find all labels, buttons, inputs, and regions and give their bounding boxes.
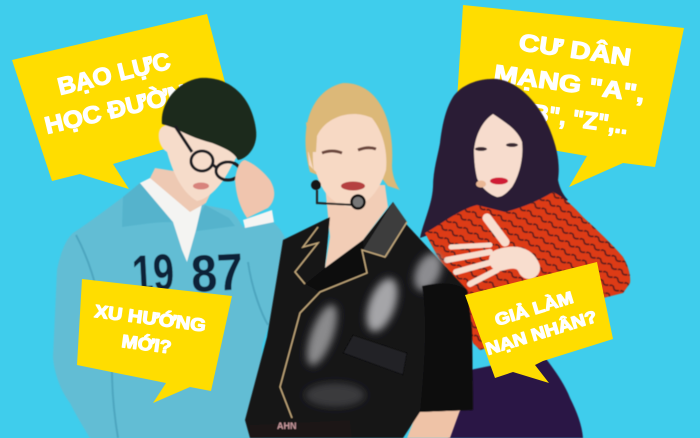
heading: bao luc hoc duong: BẠO LỰC (55, 48, 173, 101)
front hair strands (306, 118, 392, 172)
heading: cu dan mang: "B", "Z",.. (519, 98, 630, 140)
red top (425, 192, 630, 350)
sweatshirt collar and folds (122, 183, 235, 232)
heading: cu dan mang: CƯ DÂN (517, 28, 633, 72)
neck (150, 168, 218, 212)
white shirt (140, 178, 203, 262)
hair (162, 78, 256, 160)
shirt cuff (243, 210, 274, 228)
headset microphone (476, 180, 486, 188)
person: man in teal sweatshirt (53, 78, 287, 438)
arm (407, 405, 462, 438)
text: gia lam nan nhan: NẠN NHÂN? (484, 307, 599, 359)
ear and face (308, 114, 386, 208)
headset microphone (311, 180, 364, 208)
callout: top left speech bubble (12, 14, 237, 189)
heading: bao luc hoc duong (42, 48, 209, 140)
belt: AHN (277, 421, 296, 431)
face (159, 118, 242, 201)
text: xu huong moi: XU HƯỚNG (93, 300, 207, 336)
text: gia lam nan nhan (484, 288, 599, 359)
nose and lips (341, 182, 365, 190)
eyes and lips (475, 143, 518, 184)
heading: bao luc hoc duong: HỌC ĐƯỜNG (42, 74, 209, 140)
eyes (322, 148, 376, 153)
belt (250, 420, 352, 438)
sweatshirt number: 19 (131, 244, 176, 304)
hair (420, 79, 568, 238)
callout: top right speech bubble (455, 5, 684, 187)
callout: gia lam nan nhan (465, 262, 613, 383)
text: xu huong moi (93, 300, 207, 357)
heading: cu dan mang (492, 28, 646, 140)
pocket flap (343, 335, 407, 375)
glasses (175, 126, 244, 180)
person: woman in red top (420, 79, 630, 438)
face (474, 114, 522, 197)
heading: cu dan mang: MẠNG "A", (492, 60, 646, 108)
hand (447, 218, 529, 284)
text: gia lam nan nhan: GIẢ LÀM (493, 288, 576, 330)
hand (235, 160, 274, 218)
hair back (305, 83, 400, 190)
skirt (448, 355, 583, 438)
sleeve (420, 283, 473, 412)
shirt (245, 202, 473, 438)
gold piping (280, 222, 407, 418)
lips (193, 182, 209, 190)
callout: xu huong moi (77, 279, 232, 403)
sweatshirt number (131, 243, 245, 304)
leather shine (301, 202, 447, 407)
text: xu huong moi: MỚI? (120, 330, 173, 357)
sweatshirt (53, 183, 287, 438)
person: blond man in black leather shirt (245, 83, 473, 438)
neck (325, 185, 388, 268)
sweatshirt number: 87 (190, 243, 245, 304)
undershirt (305, 240, 366, 292)
